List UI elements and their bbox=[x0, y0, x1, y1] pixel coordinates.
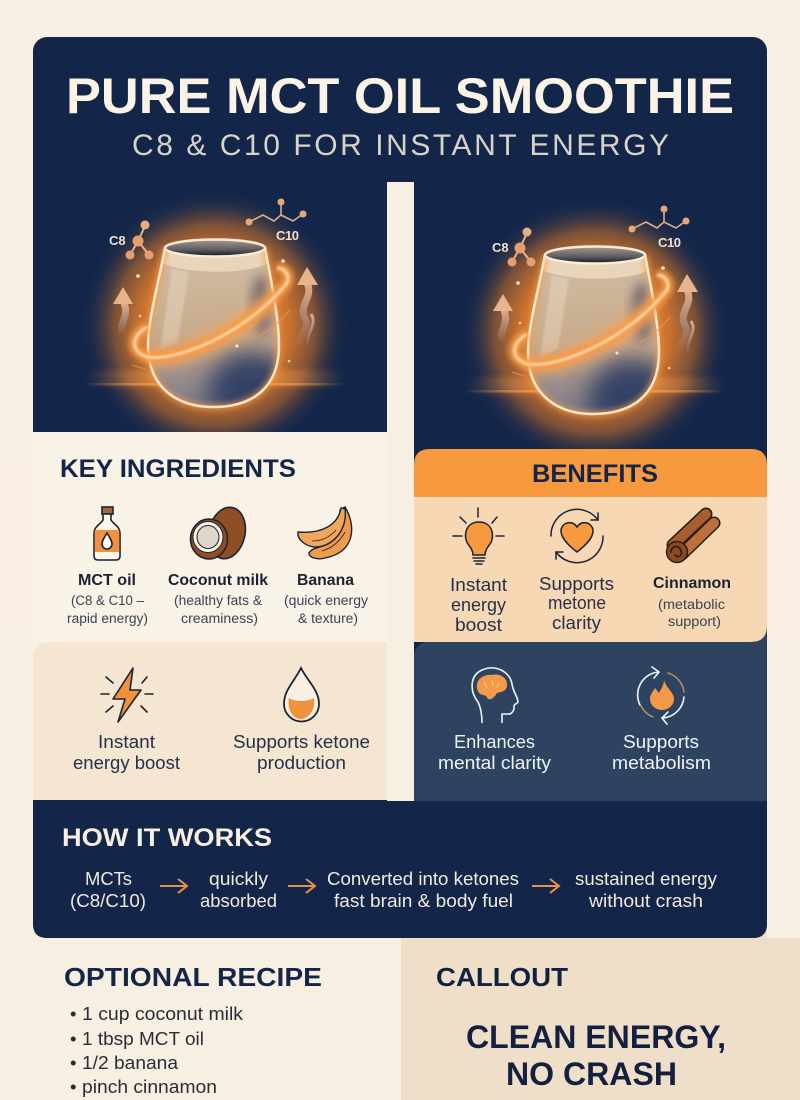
label: instant energy boost bbox=[450, 575, 507, 635]
panel: right effects bbox=[414, 626, 767, 801]
label: supports metabolism: Supports bbox=[623, 731, 699, 752]
label: instant energy boost: boost bbox=[455, 615, 502, 635]
label: instant energy boost: energy bbox=[451, 595, 506, 615]
icon: banana bbox=[298, 507, 352, 559]
molecule C10 left bbox=[246, 198, 306, 226]
label: MCT oil: MCT oil bbox=[78, 572, 136, 589]
label: coconut milk: (healthy fats & bbox=[174, 593, 262, 608]
label: supports ketone production: production bbox=[257, 752, 346, 773]
arrow 2 bbox=[288, 879, 315, 893]
heading: optional recipe: OPTIONAL RECIPE bbox=[64, 962, 322, 992]
label: instant energy boost: energy boost bbox=[73, 752, 180, 773]
step: MCTs: (C8/C10) bbox=[70, 891, 146, 911]
arrow 3 bbox=[532, 879, 559, 893]
panel: left effects bbox=[33, 642, 387, 800]
icon: coconut bbox=[190, 504, 250, 562]
callout message: CLEAN ENERGY, bbox=[466, 1019, 726, 1055]
label: cinnamon: Cinnamon bbox=[653, 575, 731, 592]
label: coconut milk bbox=[168, 572, 268, 626]
callout message: NO CRASH bbox=[506, 1056, 677, 1092]
label: banana: Banana bbox=[297, 572, 354, 589]
label: supports metabolism bbox=[612, 731, 711, 773]
label: supports ketone production: Supports ketone bbox=[233, 731, 370, 752]
recipe list bbox=[70, 1003, 244, 1097]
illustration: left glowing smoothie glass bbox=[80, 190, 350, 460]
label: supports metone clarity: Supports bbox=[539, 574, 614, 594]
icon: heart cycle bbox=[551, 509, 603, 563]
label: banana: & texture) bbox=[298, 611, 358, 626]
icon: brain in head bbox=[472, 668, 518, 723]
panel: key ingredients bbox=[33, 432, 387, 662]
label: banana: (quick energy bbox=[284, 593, 368, 608]
heading: how it works: HOW IT WORKS bbox=[62, 824, 272, 852]
icon: cinnamon sticks bbox=[666, 514, 714, 562]
navy main card bbox=[33, 37, 767, 938]
label: MCT oil: (C8 & C10 – bbox=[71, 593, 144, 608]
label: instant energy boost bbox=[73, 731, 180, 773]
illustration: right glowing smoothie glass bbox=[460, 197, 730, 467]
callout background panel bbox=[401, 925, 800, 1100]
label: supports metone clarity: clarity bbox=[552, 613, 601, 633]
recipe list: • bbox=[70, 1076, 76, 1097]
icon: lightning bolt bbox=[101, 668, 153, 722]
benefits header bbox=[414, 449, 767, 497]
icon: flame cycle bbox=[638, 667, 684, 724]
panel: callout bbox=[436, 962, 726, 1092]
recipe list: • bbox=[70, 1028, 76, 1049]
label: enhances mental clarity bbox=[438, 731, 552, 773]
C8 label right: C8 bbox=[492, 240, 509, 255]
label: cinnamon bbox=[653, 575, 731, 629]
label: instant energy boost: Instant bbox=[450, 575, 507, 595]
panel: how it works bbox=[33, 801, 767, 938]
icon: MCT oil bottle bbox=[94, 507, 120, 560]
step: quickly absorbed bbox=[200, 869, 277, 911]
label: banana bbox=[284, 572, 368, 626]
title: PURE MCT OIL SMOOTHIE bbox=[66, 68, 734, 124]
heading: callout: CALLOUT bbox=[436, 962, 568, 992]
label: supports metone clarity bbox=[539, 574, 614, 633]
heading: benefits: BENEFITS bbox=[532, 460, 658, 488]
label: supports ketone production bbox=[233, 731, 370, 773]
arrow 1 bbox=[160, 879, 187, 893]
recipe list: • bbox=[70, 1052, 76, 1073]
step: MCTs bbox=[70, 869, 146, 911]
step: quickly absorbed: quickly bbox=[209, 869, 268, 889]
molecule C8 left bbox=[126, 220, 154, 260]
step: quickly absorbed: absorbed bbox=[200, 891, 277, 911]
icon: oil drop bbox=[284, 668, 319, 722]
icon: light bulb bbox=[453, 508, 504, 564]
C10 label right: C10 bbox=[658, 235, 681, 250]
step: sustained energy: sustained energy bbox=[575, 869, 717, 889]
panel: optional recipe bbox=[64, 962, 322, 1097]
molecule C10 right bbox=[628, 206, 690, 232]
label: MCT oil: rapid energy) bbox=[67, 611, 148, 626]
heading: key ingredients: KEY INGREDIENTS bbox=[60, 455, 296, 483]
label: coconut milk: Coconut milk bbox=[168, 572, 268, 589]
recipe list: 1/2 banana bbox=[82, 1052, 179, 1073]
step: converted into ketones bbox=[327, 869, 519, 911]
label: instant energy boost: Instant bbox=[98, 731, 155, 752]
step: sustained energy: without crash bbox=[588, 891, 703, 911]
label: coconut milk: creaminess) bbox=[181, 611, 258, 626]
label: enhances mental clarity: Enhances bbox=[454, 731, 535, 752]
label: cinnamon: (metabolic bbox=[658, 597, 725, 612]
label: enhances mental clarity: mental clarity bbox=[438, 752, 552, 773]
label: MCT oil bbox=[67, 572, 148, 626]
label: supports metone clarity: metone bbox=[548, 593, 606, 613]
recipe list: pinch cinnamon bbox=[82, 1076, 217, 1097]
step: sustained energy bbox=[575, 869, 717, 911]
step: MCTs: MCTs bbox=[85, 869, 132, 889]
molecule C8 right bbox=[508, 228, 536, 266]
vertical divider bbox=[387, 182, 414, 801]
panel: benefits bbox=[414, 449, 767, 662]
recipe list: 1 cup coconut milk bbox=[82, 1003, 244, 1024]
label: supports metabolism: metabolism bbox=[612, 752, 711, 773]
recipe list: 1 tbsp MCT oil bbox=[82, 1028, 204, 1049]
step: converted into ketones: Converted into ketones bbox=[327, 869, 519, 889]
recipe list: • bbox=[70, 1003, 76, 1024]
C8 label left: C8 bbox=[109, 233, 126, 248]
callout message bbox=[466, 1019, 726, 1092]
C10 label left: C10 bbox=[276, 228, 299, 243]
step: converted into ketones: fast brain & body fuel bbox=[334, 891, 513, 911]
label: cinnamon: support) bbox=[668, 614, 721, 629]
subtitle: C8 & C10 FOR INSTANT ENERGY bbox=[132, 129, 669, 162]
